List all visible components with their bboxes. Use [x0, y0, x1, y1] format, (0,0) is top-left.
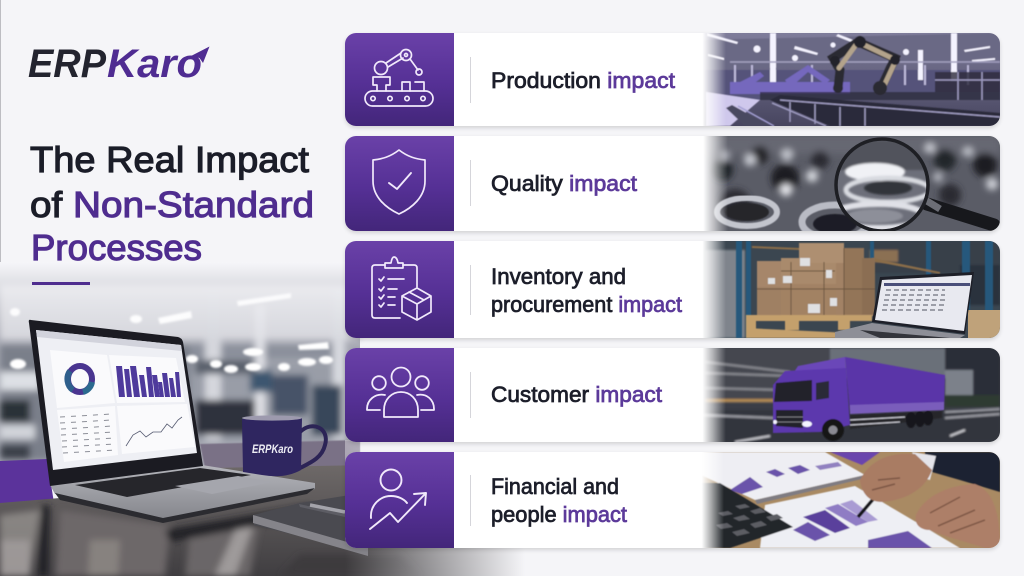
laptop: [835, 272, 974, 338]
photo: warehouse boxes and laptop: [690, 241, 1000, 338]
icon: person with rising arrow: [370, 470, 426, 529]
laptop: [29, 320, 315, 523]
suit: [925, 452, 1000, 492]
logo: [28, 42, 210, 86]
icon tile: [345, 33, 454, 126]
label: [491, 474, 627, 527]
fade into page: [0, 262, 360, 340]
photo: robotic factory line: [690, 33, 1000, 126]
laptop base: [50, 465, 315, 519]
icon tile: [345, 348, 454, 442]
photo: hands reviewing financial charts: [690, 452, 1000, 548]
purple desk backdrop: [200, 440, 360, 470]
icon tile: [345, 136, 454, 231]
icon tile: [345, 241, 454, 338]
stacked cartons: [757, 243, 875, 317]
panel: financial and people impact: [345, 450, 1000, 550]
laptop lid: [29, 320, 203, 486]
title: [30, 139, 314, 268]
coffee mug: [242, 415, 326, 476]
label: Production impact: [491, 68, 675, 93]
notebook and pen: [253, 495, 368, 556]
divider: [470, 372, 471, 418]
logo: Karo: [107, 42, 202, 86]
mug logo: ERPKaro: [252, 444, 293, 456]
label: Inventory and: [491, 264, 626, 289]
logo: ERP: [28, 42, 106, 86]
hands: [860, 454, 932, 502]
robot arm: [833, 42, 896, 90]
pallet: [746, 315, 872, 338]
bar chart: [116, 366, 181, 397]
label: [491, 264, 682, 317]
photo: metal flanges under a magnifying glass: [704, 136, 1000, 231]
pen: [856, 498, 874, 518]
calculator: [703, 482, 794, 548]
icon tile: [345, 452, 454, 548]
panel: inventory and procurement impact: [345, 239, 1000, 340]
truck: [773, 357, 945, 441]
title: Processes: [31, 227, 202, 268]
right fade of table and gaps between panels: [345, 546, 525, 576]
divider: [470, 57, 471, 103]
line chart: [126, 417, 182, 446]
left photo: laptop and mug on a factory desk: [0, 262, 535, 576]
icon: shield with check: [373, 150, 425, 214]
donut chart: [67, 366, 92, 392]
laptop screen: [36, 330, 197, 470]
divider: [470, 265, 471, 315]
panel: production impact: [345, 31, 1000, 128]
data table: [60, 414, 116, 453]
icon: group of customers: [367, 368, 434, 417]
blurred factory backdrop: [0, 262, 360, 470]
divider: [470, 475, 471, 526]
divider: [470, 160, 471, 206]
table surface: [0, 462, 530, 576]
label: Customer impact: [491, 382, 662, 407]
panel: quality impact: [345, 134, 1000, 239]
icon: robot arm on conveyor: [365, 50, 433, 106]
label: Quality impact: [491, 171, 637, 196]
photo: purple truck on city road: [690, 348, 1000, 442]
magnifying glass: [832, 139, 994, 231]
label: Financial and: [491, 474, 619, 499]
title: of Non-Standard: [30, 184, 314, 225]
keyboard: [75, 468, 251, 497]
icon: logo arrow: [191, 46, 210, 63]
icon: clipboard and box: [372, 257, 431, 320]
title: The Real Impact: [30, 139, 309, 180]
label: procurement impact: [491, 292, 682, 317]
panel: customer impact: [345, 346, 1000, 444]
label: people impact: [491, 502, 627, 527]
